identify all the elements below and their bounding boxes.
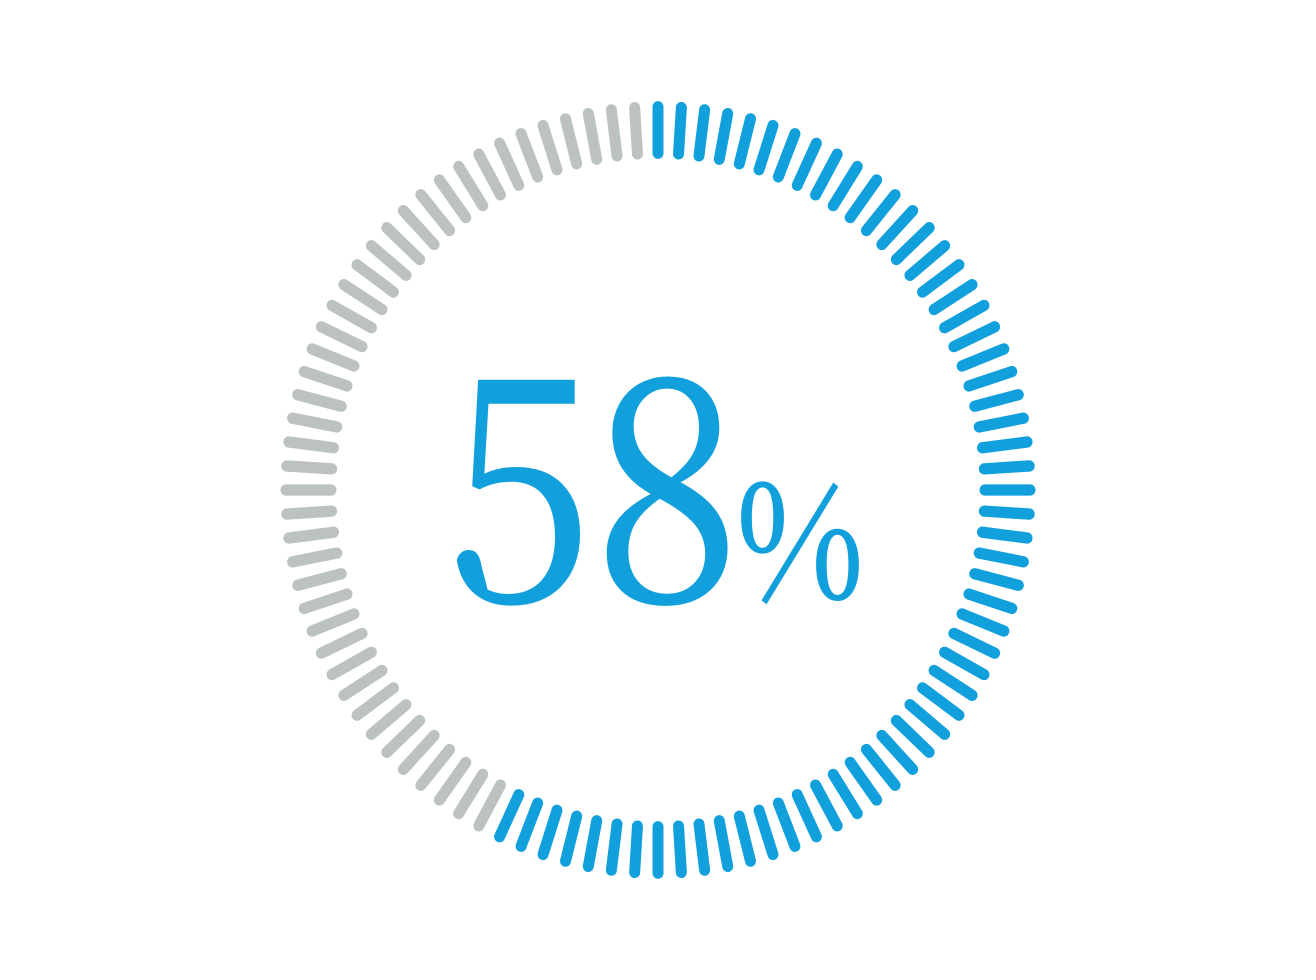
percentage value bbox=[447, 241, 864, 689]
digit 5: 5 bbox=[447, 241, 592, 689]
digit 8: 8 bbox=[594, 243, 740, 689]
gray ticks: 42 remaining bbox=[236, 70, 640, 826]
blue ticks: 58 completed bbox=[499, 107, 1073, 921]
percent sign: % bbox=[736, 417, 864, 644]
progress ring with 100 ticks bbox=[236, 70, 1073, 921]
